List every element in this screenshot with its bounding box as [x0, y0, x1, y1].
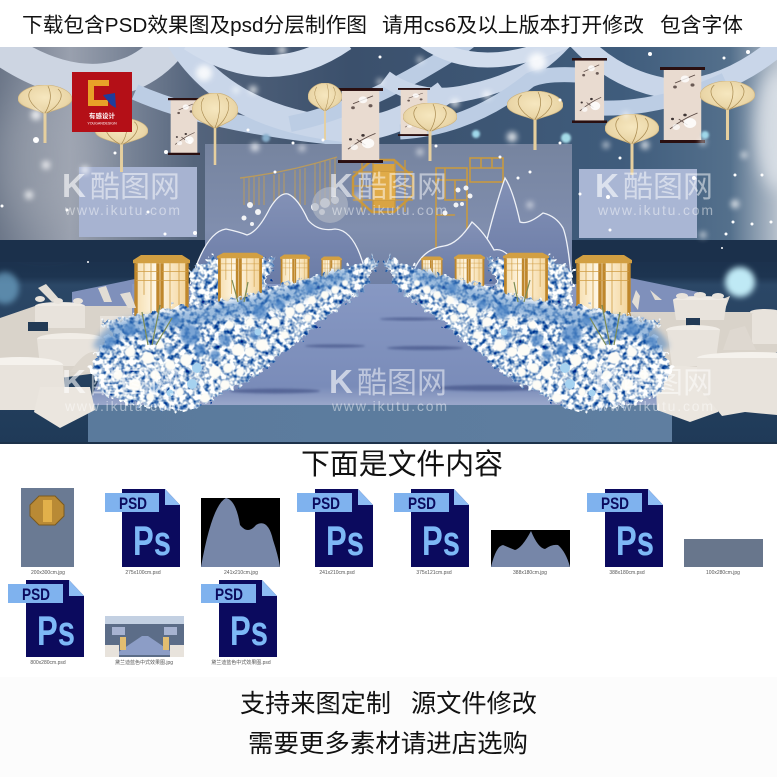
footer line one: 支持来图定制	[240, 690, 391, 718]
icon: PSD file 5: PSD	[22, 585, 50, 604]
lattice screens	[436, 158, 503, 248]
footer line two: 需要更多素材请进店选购	[248, 730, 528, 758]
icon: PSD file 3	[394, 489, 469, 576]
header note: 请用cs6及以上版本打开修改	[382, 14, 644, 37]
watermarks: www.ikutu.com	[597, 398, 713, 414]
flowers right aisle	[384, 257, 672, 412]
thumb: window panel: 200x300cm.jpg	[31, 570, 65, 576]
icon: PSD file 4	[587, 489, 663, 576]
header note: 下载包含PSD效果图及psd分层制作图	[22, 14, 367, 37]
falling snow bokeh	[0, 46, 772, 263]
right mountains	[410, 178, 572, 285]
thumb: grey panel: 100x280cm.jpg	[706, 570, 740, 576]
watermarks: K	[62, 167, 86, 204]
watermarks: www.ikutu.com	[597, 202, 713, 218]
left mountain	[190, 194, 368, 285]
icon: PSD file 3: PSD	[408, 494, 436, 513]
paper lanterns	[18, 81, 755, 175]
icon: PSD file 1: 275x100cm.psd	[125, 570, 161, 576]
hanging scrolls	[168, 58, 705, 163]
backdrop panel	[205, 144, 572, 286]
file list	[8, 488, 763, 666]
back flower sprays	[190, 256, 275, 305]
watermarks: K	[329, 363, 353, 400]
logo badge: 有感设计	[89, 111, 116, 120]
stage side platforms	[72, 278, 698, 312]
icon: PSD file 1: Ps	[133, 517, 171, 564]
watermarks: 酷图网	[623, 367, 713, 400]
icon: PSD file 2	[297, 489, 373, 576]
watermarks: K	[595, 363, 619, 400]
left side screen	[79, 167, 197, 237]
icon: PSD file 3: 375x121cm.psd	[416, 570, 452, 576]
scene backdrop wall	[0, 47, 777, 444]
stage front face	[0, 405, 777, 444]
watermarks: www.ikutu.com	[64, 398, 180, 414]
watermarks: K	[595, 167, 619, 204]
header note: 包含字体	[660, 14, 743, 37]
panel: wedding stage scene	[0, 36, 777, 444]
thumb: mountain on black 2: 388x180cm.jpg	[513, 570, 547, 576]
icon: PSD file 4: PSD	[601, 494, 629, 513]
thumb: mountain on black 1: 241x210cm.jpg	[224, 570, 258, 576]
right side screen	[579, 169, 697, 238]
icon: PSD file 2: 241x210cm.psd	[319, 570, 355, 576]
watermarks: www.ikutu.com	[64, 202, 180, 218]
logo badge	[72, 72, 132, 132]
icon: PSD file 6: Ps	[230, 607, 268, 654]
footer line one: 源文件修改	[411, 690, 537, 718]
icon: PSD file 6: 黛兰迪蓝色中式效果图.psd	[211, 659, 271, 666]
icon: PSD file 4: Ps	[616, 517, 654, 564]
watermarks: K	[329, 167, 353, 204]
icon: PSD file 2: PSD	[312, 494, 340, 513]
file section heading: 下面是文件内容	[301, 448, 503, 481]
icon: PSD file 3: Ps	[422, 517, 460, 564]
thumb: mountain on black 1	[201, 498, 280, 576]
gold lamps	[133, 252, 632, 316]
octagonal lattice window	[353, 160, 413, 212]
icon: PSD file 6: PSD	[215, 585, 243, 604]
tables left	[0, 284, 136, 428]
icon: PSD file 5	[8, 580, 84, 666]
thumb: window panel	[21, 488, 74, 576]
footer line one	[240, 690, 537, 718]
icon: PSD file 5: 800x280cm.psd	[30, 660, 66, 666]
thumb: grey panel	[684, 539, 763, 576]
footer panel background	[0, 677, 777, 777]
flowers left aisle	[90, 257, 378, 412]
thumb: mini scene	[105, 616, 184, 666]
watermarks	[62, 167, 713, 414]
icon: PSD file 1: PSD	[119, 494, 147, 513]
stage floor and aisle	[88, 284, 672, 405]
watermarks: www.ikutu.com	[331, 398, 447, 414]
icon: PSD file 4: 388x180cm.psd	[609, 570, 645, 576]
watermarks: 酷图网	[623, 171, 713, 204]
icon: PSD file 5: Ps	[37, 607, 75, 654]
ceiling ribbons	[0, 36, 777, 138]
watermarks: 酷图网	[357, 367, 447, 400]
watermarks: 酷图网	[90, 367, 180, 400]
header note	[22, 14, 743, 37]
watermarks: www.ikutu.com	[331, 202, 447, 218]
logo badge: YOUGANDESIGN	[87, 122, 117, 126]
watermarks: 酷图网	[357, 171, 447, 204]
tables right	[630, 290, 777, 422]
icon: PSD file 2: Ps	[326, 517, 364, 564]
back flower sprays right	[487, 256, 572, 305]
icon: PSD file 1	[105, 489, 180, 576]
blossom sprays on backdrop	[242, 186, 472, 226]
icon: PSD file 6	[201, 580, 277, 666]
watermarks: 酷图网	[90, 171, 180, 204]
watermarks: K	[62, 363, 86, 400]
thumb: mini scene: 黛兰迪蓝色中式效果图.jpg	[115, 659, 173, 666]
thumb: mountain on black 2	[491, 530, 570, 576]
aisle shadow streaks	[230, 318, 545, 394]
gold railing	[240, 157, 337, 205]
